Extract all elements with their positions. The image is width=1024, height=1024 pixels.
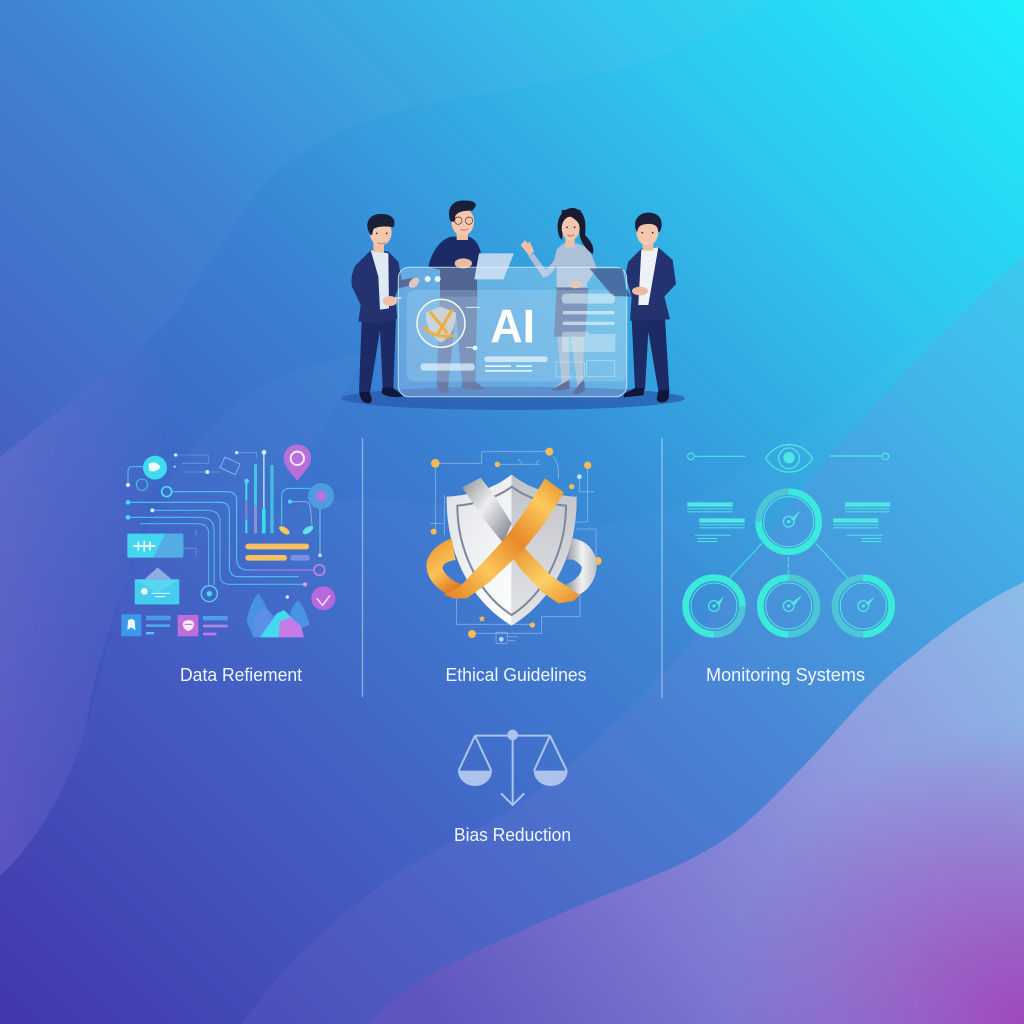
play node	[126, 456, 167, 490]
connector lines	[729, 543, 848, 578]
person: right man in suit	[623, 213, 676, 402]
top mini circuit	[176, 453, 257, 475]
mini shield emblem	[417, 299, 480, 350]
background: corner purple glow	[720, 720, 1024, 1024]
background wave: bottom right lilac	[366, 582, 1024, 1024]
AI label: AI	[490, 299, 535, 352]
background wave: upper left light swoosh	[0, 0, 765, 457]
panel text lines	[421, 294, 615, 372]
target node	[278, 483, 334, 557]
left gauge	[686, 578, 742, 634]
check badge	[311, 586, 335, 610]
left text lines	[687, 502, 745, 542]
laptop	[474, 253, 514, 279]
section label: Bias Reduction: Bias Reduction	[454, 825, 571, 845]
right gauge	[835, 578, 892, 634]
eye icon	[766, 445, 813, 472]
ground shadow	[342, 387, 685, 410]
gold ribbon lower right	[505, 547, 580, 603]
laptop back on panel	[589, 268, 632, 297]
gold ribbon main	[443, 478, 564, 598]
section label: Ethical Guidelines: Ethical Guidelines	[446, 665, 586, 685]
divider right	[661, 438, 663, 698]
section label: Monitoring Systems: Monitoring Systems	[706, 665, 865, 685]
section: Data Refinement icon	[121, 445, 335, 637]
mountains chart	[247, 593, 309, 637]
vertical sliders	[244, 450, 274, 533]
section: Monitoring Systems	[686, 445, 892, 634]
panel dots	[425, 276, 441, 282]
background wave: mid band	[0, 255, 1024, 1024]
left ribbon loop	[426, 538, 465, 596]
icon: balance scale with down arrow	[458, 730, 568, 805]
person: woman in grey top	[521, 208, 597, 394]
top mini nodes	[174, 451, 238, 474]
divider left	[362, 438, 364, 697]
map pin	[284, 445, 311, 481]
hero illustration: team around AI panel	[342, 201, 685, 410]
circuit lines	[128, 487, 325, 602]
panel small icons	[556, 361, 615, 377]
section label: Data Refiement: Data Refiement	[180, 665, 302, 685]
orange bars	[245, 544, 310, 561]
glass AI panel	[398, 267, 632, 397]
person: left man in suit	[351, 214, 421, 403]
shield	[447, 474, 577, 626]
middle gauge	[760, 578, 817, 634]
gold nodes	[431, 448, 602, 642]
right ribbon loop	[564, 538, 597, 596]
right text lines	[833, 502, 890, 542]
circuit background	[430, 452, 596, 644]
blue badge row	[121, 614, 171, 636]
waveform card	[127, 530, 196, 558]
person: man in navy sweater	[428, 201, 485, 394]
purple badge row	[178, 615, 228, 636]
eye connector lines	[688, 453, 889, 460]
background wave: left lilac tint	[0, 340, 165, 876]
silver ribbon	[462, 478, 512, 543]
background wave: lower sweep	[242, 255, 1024, 1024]
circuit nodes	[126, 500, 307, 599]
section: Ethical Guidelines shield	[426, 448, 602, 644]
envelope card	[135, 567, 179, 604]
main gauge	[759, 492, 819, 552]
